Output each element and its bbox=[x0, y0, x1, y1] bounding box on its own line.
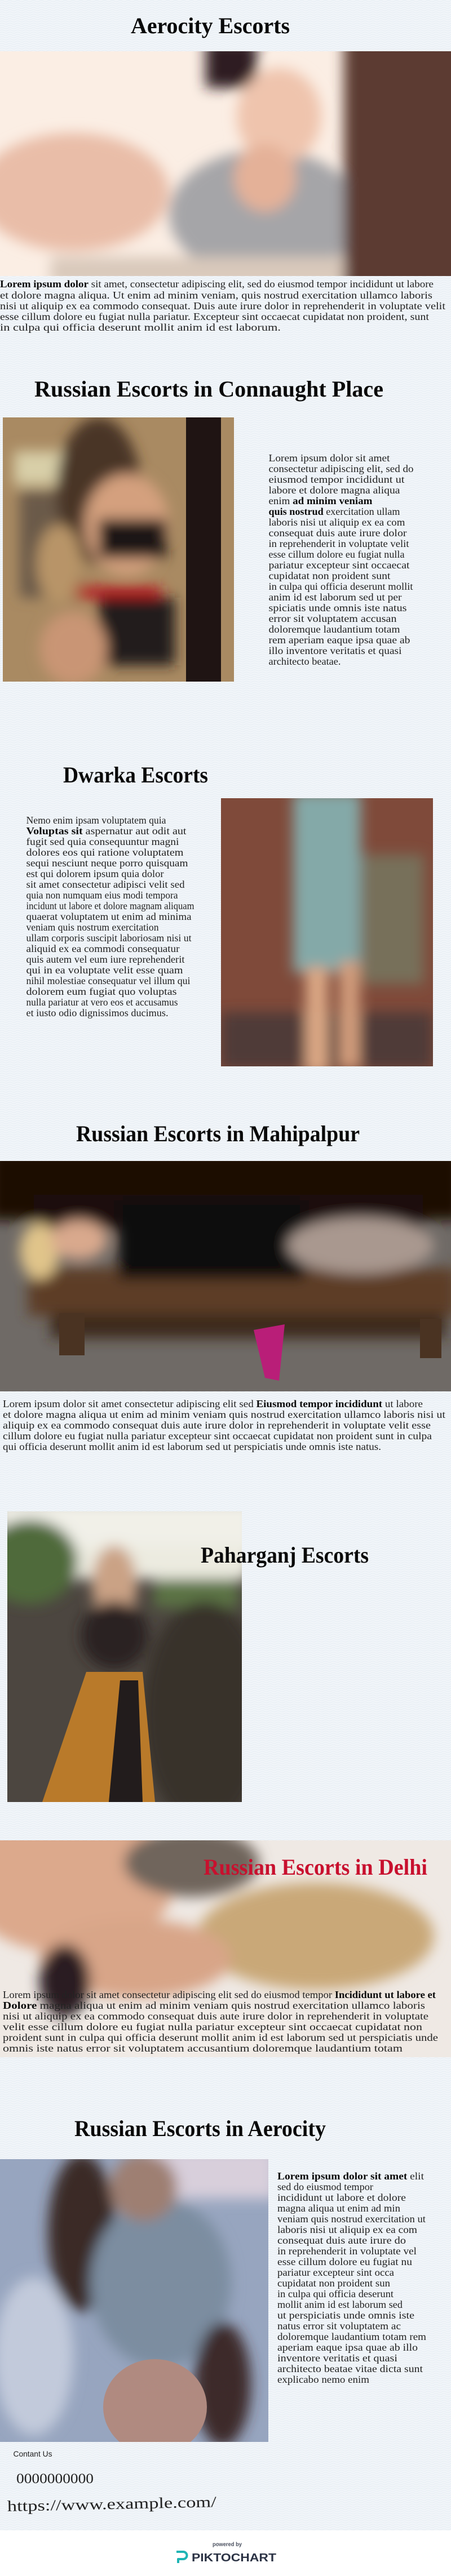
text block: section one: et dolore magna aliqua. Ut enim ad minim veniam, quis nostrud exercitation ullamco laboris bbox=[0, 290, 432, 301]
heading: Russian Escorts in Delhi (red): Russian Escorts in Delhi bbox=[204, 1854, 427, 1880]
text block: section six: omnis iste natus error sit voluptatem accusantium doloremque laudantium totam bbox=[3, 2043, 403, 2054]
text block: section three bbox=[26, 815, 194, 1018]
text block: section seven: laboris nisi ut aliquip ex ea com bbox=[277, 2224, 417, 2235]
text block: section four: aliquip ex ea commodo consequat duis aute irure dolor in reprehenderit in voluptate velit esse bbox=[3, 1420, 431, 1431]
text block: section three: incidunt ut labore et dolore magnam aliquam bbox=[26, 900, 194, 911]
text block: section three: quia non numquam eius modi tempora bbox=[26, 889, 178, 901]
photo placeholder: section seven bbox=[0, 2159, 268, 2442]
text block: section two: quis nostrud exercitation ullam bbox=[268, 506, 400, 517]
footer credit: powered by Piktochart: PIKTOCHART bbox=[192, 2552, 276, 2564]
text block: section three: quis autem vel eum iure reprehenderit bbox=[26, 954, 185, 965]
heading: Paharganj Escorts: Paharganj Escorts bbox=[201, 1542, 369, 1568]
text block: section seven: aperiam eaque ipsa quae ab illo bbox=[277, 2342, 418, 2353]
text block: section seven: cupidatat non proident sun bbox=[277, 2277, 390, 2289]
text block: section two: consectetur adipiscing elit, sed do bbox=[268, 463, 414, 474]
text block: section two: pariatur excepteur sint occaecat bbox=[268, 559, 409, 571]
text block: section six: velit esse cillum dolore eu fugiat nulla pariatur excepteur sint occaecat cupidatat non bbox=[3, 2021, 422, 2032]
text block: section two: eiusmod tempor incididunt ut bbox=[268, 474, 405, 485]
text block: section six bbox=[3, 1989, 438, 2054]
text block: section four: et dolore magna aliqua ut enim ad minim veniam quis nostrud exercitation ullamco laboris nisi ut bbox=[3, 1409, 445, 1420]
text block: section one: Lorem ipsum dolor sit amet, consectetur adipiscing elit, sed do eiusmod tempor incididunt ut labore bbox=[0, 278, 434, 290]
text block: section seven: veniam quis nostrud exercitation ut bbox=[277, 2213, 426, 2224]
text block: section three: nihil molestiae consequatur vel illum qui bbox=[26, 975, 191, 986]
text block: section four: qui officia deserunt mollit anim id est laborum sed ut perspiciatis unde omnis iste natus. bbox=[3, 1441, 381, 1452]
text block: section seven: sed do eiusmod tempor bbox=[277, 2181, 373, 2192]
text block: section three: aliquid ex ea commodi consequatur bbox=[26, 943, 180, 954]
text block: section three: quaerat voluptatem ut enim ad minima bbox=[26, 911, 192, 922]
text block: section seven: ut perspiciatis unde omnis iste bbox=[277, 2310, 414, 2321]
text block: section three: veniam quis nostrum exercitation bbox=[26, 922, 159, 933]
text block: section three: est qui dolorem ipsum quia dolor bbox=[26, 868, 163, 879]
heading: Russian Escorts in Connaught Place: Russian Escorts in Connaught Place bbox=[34, 376, 383, 402]
text block: section three: qui in ea voluptate velit esse quam bbox=[26, 964, 183, 976]
text block: section seven: inventore veritatis et quasi bbox=[277, 2352, 397, 2364]
text block: section three: ullam corporis suscipit laboriosam nisi ut bbox=[26, 932, 192, 944]
text block: section two: laboris nisi ut aliquip ex ea com bbox=[268, 517, 405, 528]
text block: section three: nulla pariatur at vero eos et accusamus bbox=[26, 996, 178, 1008]
contact heading: Contant Us bbox=[14, 2449, 52, 2458]
text block: section two bbox=[268, 452, 414, 667]
text block: section seven: pariatur excepteur sint occa bbox=[277, 2267, 394, 2278]
text block: section seven: natus error sit voluptatem ac bbox=[277, 2320, 401, 2332]
text block: section six: nisi ut aliquip ex ea commodo consequat duis aute irure dolor in reprehenderit in voluptate bbox=[3, 2010, 428, 2022]
photo placeholder: section six bbox=[0, 1840, 451, 2057]
text block: section three: sit amet consectetur adipisci velit sed bbox=[26, 879, 185, 890]
text block: section three: sequi nesciunt neque porro quisquam bbox=[26, 857, 188, 869]
text block: section seven: explicabo nemo enim bbox=[277, 2374, 369, 2385]
text block: section three: dolores eos qui ratione voluptatem bbox=[26, 847, 184, 858]
text block: section two: enim ad minim veniam bbox=[268, 495, 372, 506]
text block: section two: illo inventore veritatis et quasi bbox=[268, 645, 401, 656]
text block: section seven: doloremque laudantium totam rem bbox=[277, 2331, 426, 2342]
text block: section two: error sit voluptatem accusan bbox=[268, 613, 397, 624]
text block: section one: nisi ut aliquip ex ea commodo consequat. Duis aute irure dolor in reprehenderit in voluptate velit bbox=[0, 300, 445, 312]
text block: section one: in culpa qui officia deserunt mollit anim id est laborum. bbox=[0, 322, 281, 333]
text block: section three: et iusto odio dignissimos ducimus. bbox=[26, 1007, 168, 1018]
text block: section seven: consequat duis aute irure do bbox=[277, 2235, 406, 2246]
text block: section two: spiciatis unde omnis iste natus bbox=[268, 602, 407, 613]
text block: section four bbox=[3, 1398, 445, 1452]
text block: section two: anim id est laborum sed ut per bbox=[268, 591, 402, 603]
heading: Russian Escorts in Aerocity: Russian Escorts in Aerocity bbox=[74, 2116, 326, 2141]
text block: section seven: architecto beatae vitae dicta sunt bbox=[277, 2363, 423, 2374]
text block: section seven bbox=[277, 2170, 426, 2385]
placeholder phone number: 0000000000 bbox=[16, 2471, 94, 2486]
text block: section three: Voluptas sit aspernatur aut odit aut bbox=[26, 825, 186, 837]
text block: section seven: mollit anim id est laborum sed bbox=[277, 2299, 403, 2310]
photo placeholder: section one bbox=[0, 51, 451, 276]
footer credit: powered by Piktochart: powered by bbox=[213, 2542, 242, 2548]
text block: section three: Nemo enim ipsam voluptatem quia bbox=[26, 815, 166, 826]
text block: section two: esse cillum dolore eu fugiat nulla bbox=[268, 549, 405, 560]
text block: section two: consequat duis aute irure dolor bbox=[268, 527, 407, 539]
text block: section two: Lorem ipsum dolor sit amet bbox=[268, 452, 390, 464]
text block: section seven: Lorem ipsum dolor sit amet elit bbox=[277, 2170, 424, 2182]
text block: section two: in culpa qui officia deserunt mollit bbox=[268, 581, 413, 592]
text block: section seven: esse cillum dolore eu fugiat nu bbox=[277, 2256, 412, 2267]
text block: section four: Lorem ipsum dolor sit amet consectetur adipiscing elit sed Eiusmod tempor incididunt ut labore bbox=[3, 1398, 423, 1409]
heading: Dwarka Escorts: Dwarka Escorts bbox=[63, 762, 208, 788]
text block: section six: proident sunt in culpa qui officia deserunt mollit anim id est laborum sed ut perspiciatis unde bbox=[3, 2032, 438, 2043]
text block: section two: rem aperiam eaque ipsa quae ab bbox=[268, 634, 410, 646]
text block: section two: architecto beatae. bbox=[268, 656, 341, 667]
heading: Aerocity Escorts: Aerocity Escorts bbox=[131, 13, 290, 38]
text block: section seven: in culpa qui officia deserunt bbox=[277, 2288, 393, 2299]
text block: section two: cupidatat non proident sunt bbox=[268, 570, 390, 581]
text block: section two: labore et dolore magna aliqua bbox=[268, 484, 400, 496]
text block: section six: Dolore magna aliqua ut enim ad minim veniam quis nostrud exercitation ullamco laboris bbox=[3, 2000, 425, 2011]
text block: section two: doloremque laudantium totam bbox=[268, 624, 400, 635]
text block: section one: esse cillum dolore eu fugiat nulla pariatur. Excepteur sint occaecat cupidatat non proident, sunt bbox=[0, 311, 429, 322]
footer credit: powered by Piktochart bbox=[176, 2542, 276, 2564]
heading: Russian Escorts in Mahipalpur: Russian Escorts in Mahipalpur bbox=[76, 1121, 360, 1146]
text block: section three: fugit sed quia consequuntur magni bbox=[26, 836, 179, 847]
photo placeholder: section two bbox=[3, 417, 234, 682]
text block: section seven: in reprehenderit in voluptate vel bbox=[277, 2245, 417, 2257]
text block: section seven: magna aliqua ut enim ad min bbox=[277, 2203, 400, 2214]
footer band bbox=[0, 2530, 451, 2576]
text block: section one bbox=[0, 278, 445, 333]
text block: section four: cillum dolore eu fugiat nulla pariatur excepteur sint occaecat cupidatat non proident sunt in culpa bbox=[3, 1430, 432, 1442]
text block: section three: dolorem eum fugiat quo voluptas bbox=[26, 986, 177, 997]
photo placeholder: section five bbox=[7, 1511, 242, 1802]
photo placeholder: section four bbox=[0, 1161, 451, 1391]
photo placeholder: section three bbox=[221, 798, 433, 1066]
placeholder web address: https://www.example.com/ bbox=[7, 2493, 217, 2515]
text block: section six: Lorem ipsum dolor sit amet consectetur adipiscing elit sed do eiusmod tempor Incididunt ut labore et bbox=[3, 1989, 436, 2000]
text block: section two: in reprehenderit in voluptate velit bbox=[268, 538, 409, 549]
text block: section seven: incididunt ut labore et dolore bbox=[277, 2192, 406, 2203]
